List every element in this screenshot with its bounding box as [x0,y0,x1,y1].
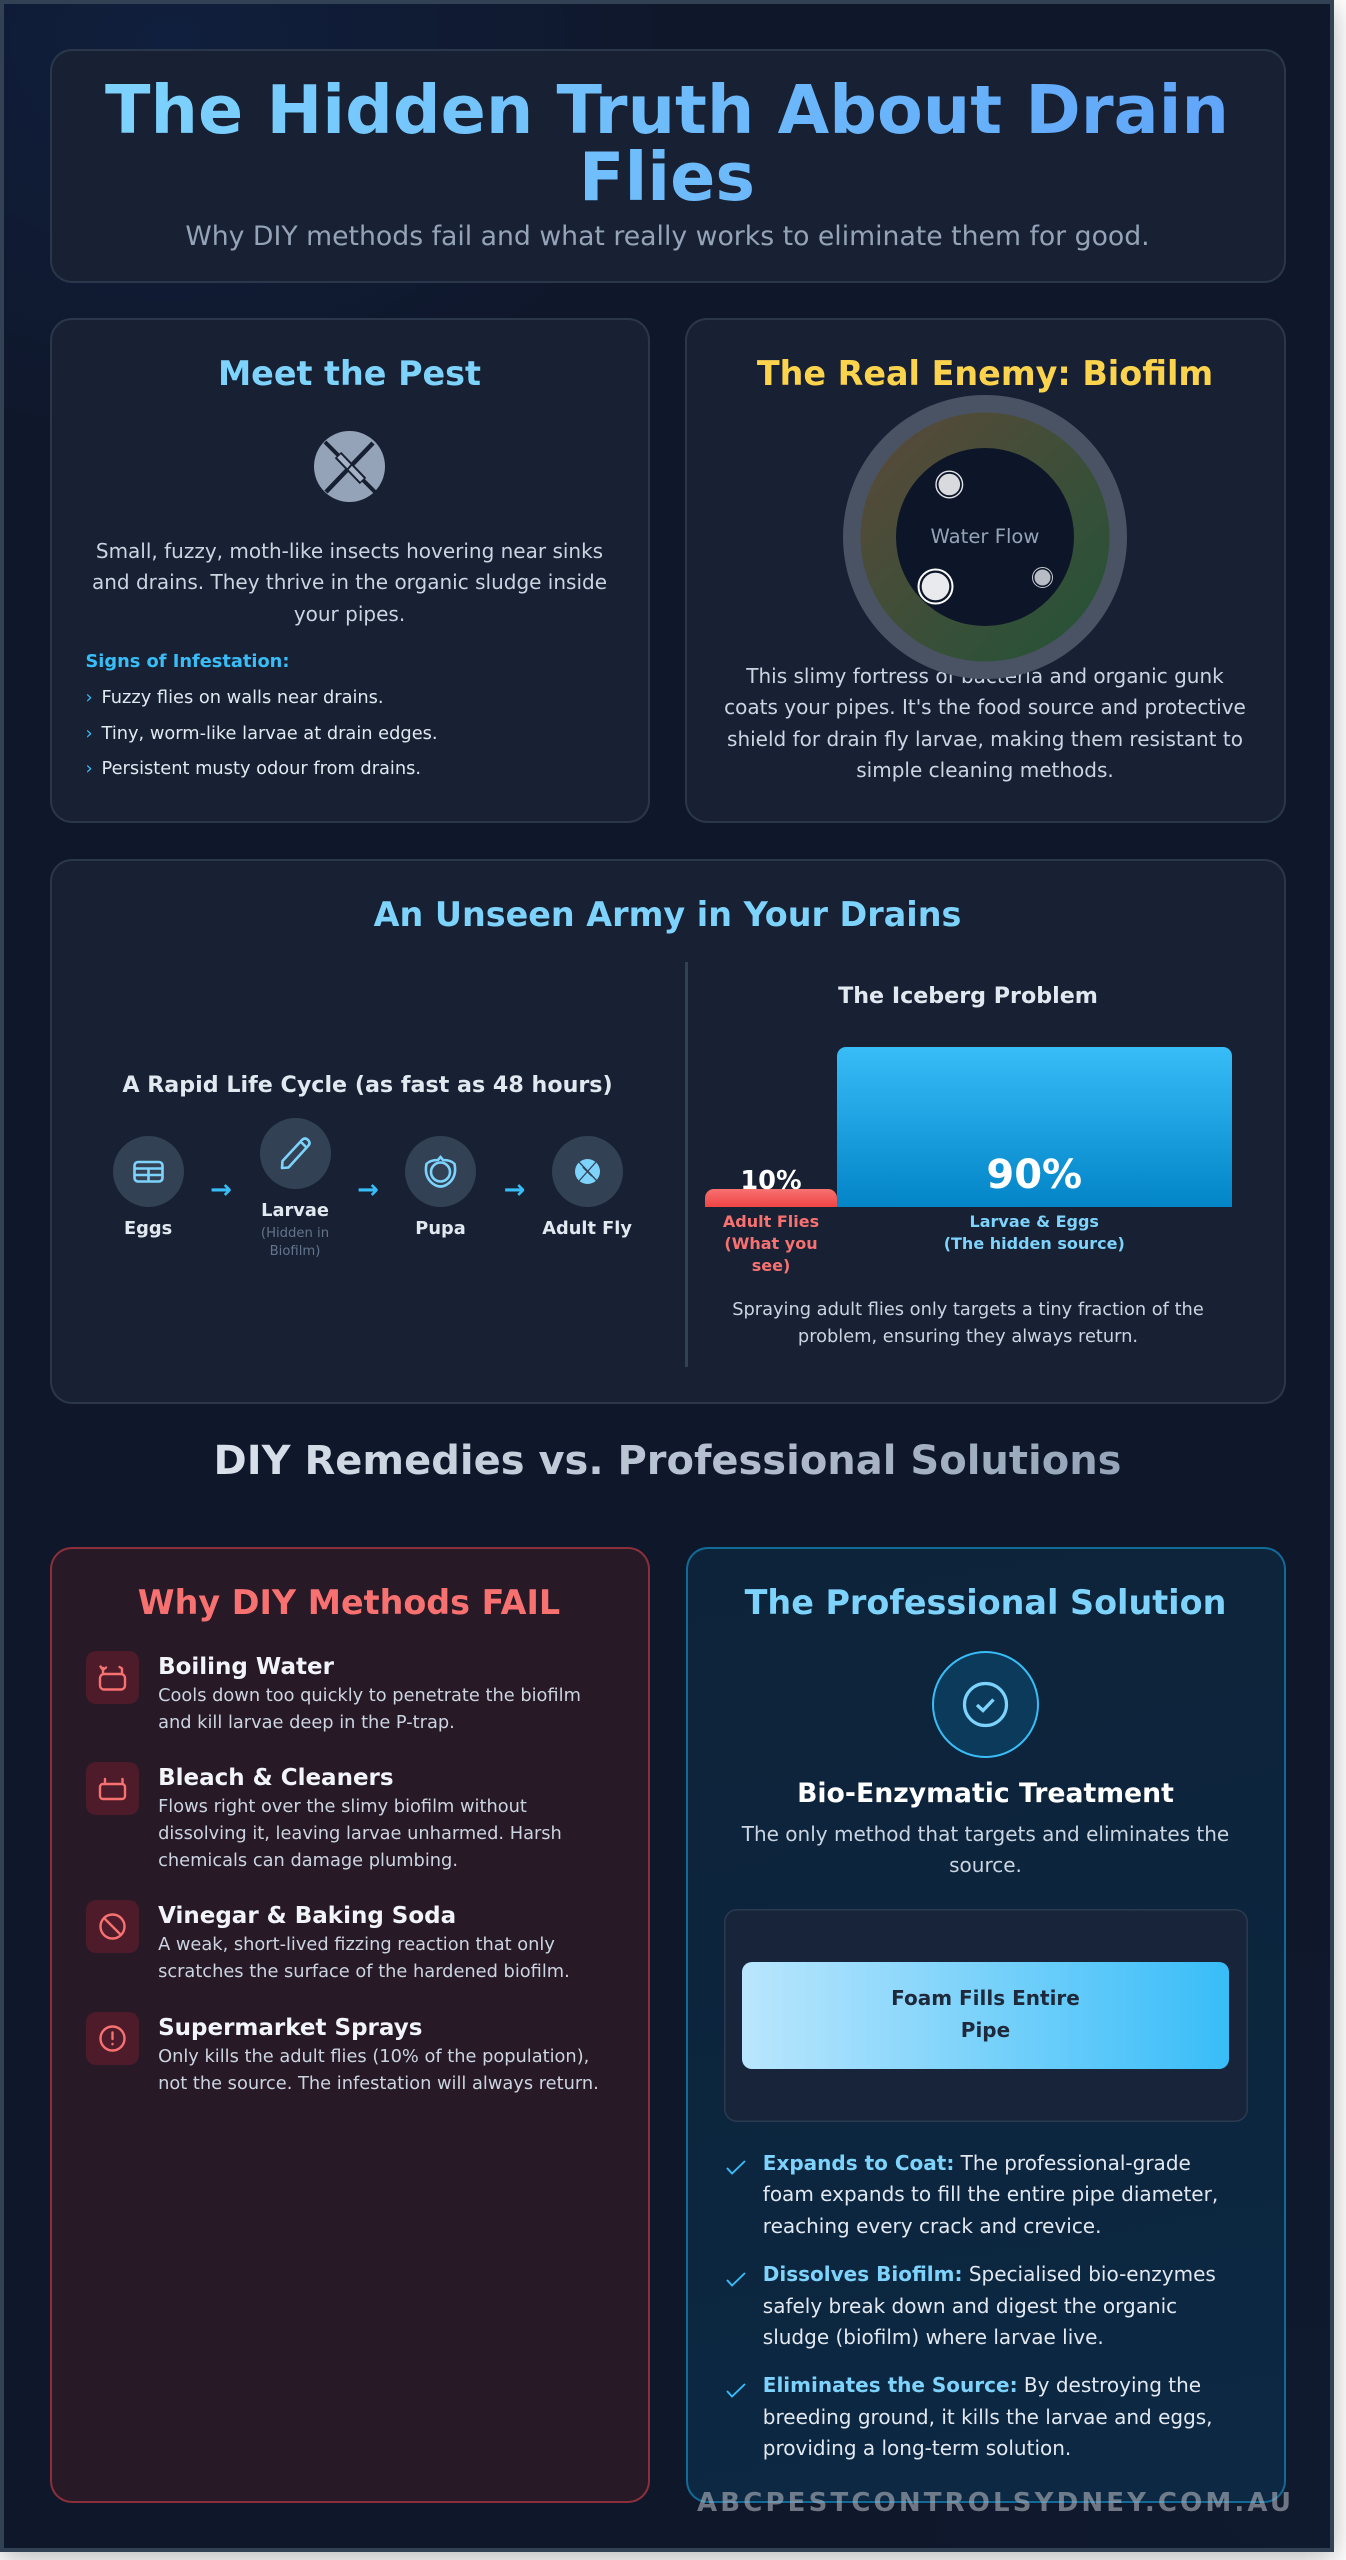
icon: kettle [86,1651,139,1704]
description text: shield for drain fly larvae, making them resistant to [727,727,1243,751]
benefit text: breeding ground, it kills the larvae and eggs, [763,2405,1213,2429]
step: adult fly [542,1136,632,1239]
description text: coats your pipes. It's the food source and protective [724,695,1246,719]
label: adult flies: see) [752,1256,790,1275]
item: bleach and cleaners [86,1762,562,1871]
benefit text: Dissolves Biofilm: Specialised bio-enzymes [763,2262,1216,2286]
bar chart: iceberg [705,1047,1232,1275]
title: treatment: Bio-Enzymatic Treatment [797,1778,1174,1808]
description text [724,664,1246,782]
benefit text [763,2262,1216,2349]
step: pupa [405,1136,476,1239]
benefit text: providing a long-term solution. [763,2436,1071,2460]
title: Supermarket Sprays [158,2015,422,2041]
step: larvae [260,1118,331,1259]
label: adult fly: Adult Fly [542,1218,632,1239]
text: iceberg explanation [732,1299,1204,1347]
benefit text: Expands to Coat: The professional-grade [763,2151,1191,2175]
icon: larvae [260,1118,331,1189]
item: supermarket sprays [86,2012,599,2094]
icon: crossed-out fly [314,431,385,502]
description text: Small, fuzzy, moth-like insects hovering near sinks [96,539,603,563]
check mark [726,2160,746,2175]
benefit: dissolves biofilm [726,2262,1216,2349]
description [158,1934,570,1982]
heading: an unseen army: An Unseen Army in Your Drains [374,895,961,934]
arrow 3: → [504,1175,525,1205]
benefit text: foam expands to fill the entire pipe diameter, [763,2182,1218,2206]
label: adult flies: Adult Flies [723,1212,819,1231]
icon: check badge [932,1651,1039,1758]
description text: simple cleaning methods. [856,758,1114,782]
benefit text: reaching every crack and crevice. [763,2214,1101,2238]
description text: This slimy fortress of bacteria and organic gunk [746,664,1224,688]
description text: your pipes. [294,602,405,626]
panel: unseen army [50,859,1286,1404]
diagram: pipe cross-section [843,395,1127,679]
heading: meet the pest: Meet the Pest [218,354,481,393]
note: hidden in biofilm: Biofilm) [270,1244,320,1259]
item: vinegar and baking soda [86,1900,570,1982]
benefit text [763,2373,1213,2460]
description: chemicals can damage plumbing. [158,1850,458,1871]
list: signs: Fuzzy flies on walls near drains. [102,687,384,708]
title [102,77,1232,211]
note: hidden in biofilm: (Hidden in [261,1226,329,1241]
panel: header [50,49,1286,283]
label: pupa: Pupa [415,1218,466,1239]
icon: alert [86,2012,139,2065]
foam label: Pipe [961,2018,1010,2042]
title: Flies [579,138,755,216]
panel: meet the pest [50,318,650,823]
label: larvae: Larvae [261,1200,329,1221]
value: 10%: 10% [740,1166,802,1196]
note: hidden in biofilm [261,1226,329,1259]
subheading: signs of infestation: Signs of Infestation: [86,651,289,672]
description: scratches the surface of the hardened biofilm. [158,1961,570,1982]
list: signs [86,687,438,779]
list: signs: › [86,758,93,779]
description: A weak, short-lived fizzing reaction that only [158,1934,555,1955]
icon: bottle [86,1762,139,1815]
description text: and drains. They thrive in the organic sludge inside [92,570,607,594]
diagram: foam in pipe [724,1909,1248,2122]
title: Boiling Water [158,1654,334,1680]
heading: the professional solution: The Professional Solution [745,1583,1226,1622]
panel: professional solution [686,1546,1286,2503]
diagram: pipe cross-section: Water Flow [931,525,1039,548]
item: boiling water [86,1651,581,1733]
label: adult flies [723,1212,819,1275]
description text [92,539,607,626]
description: Cools down too quickly to penetrate the biofilm [158,1685,581,1706]
benefit: expands to coat [726,2151,1218,2238]
text: iceberg explanation: Spraying adult flies only targets a tiny fraction of the [732,1299,1204,1320]
description [158,1796,562,1871]
check mark [726,2272,746,2287]
foam label [891,1986,1080,2042]
arrow 1: → [210,1175,232,1205]
watermark: ABCPESTCONTROLSYDNEY.COM.AU [697,2488,1294,2518]
description: Flows right over the slimy biofilm without [158,1796,527,1817]
description [158,2046,599,2094]
heading: diy vs professional: DIY Remedies vs. Professional Solutions [214,1438,1121,1484]
text: treatment summary: The only method that targets and eliminates the [742,1822,1229,1846]
icon: eggs [113,1136,184,1207]
title: The Hidden Truth About Drain [105,71,1229,149]
benefit text: sludge (biofilm) where larvae live. [763,2325,1104,2349]
label: eggs: Eggs [124,1218,172,1239]
foam label: Foam Fills Entire [891,1986,1080,2010]
description: dissolving it, leaving larvae unharmed. Harsh [158,1823,562,1844]
subtitle: Why DIY methods fail and what really works to eliminate them for good. [185,221,1150,252]
heading: the real enemy: The Real Enemy: Biofilm [757,354,1213,393]
list: signs: › [86,723,93,744]
heading: life cycle: A Rapid Life Cycle (as fast as 48 hours) [122,1072,613,1098]
bar: 10 percent [705,1189,836,1207]
label: larvae and eggs: (The hidden source) [944,1234,1125,1253]
label: larvae and eggs [944,1212,1125,1253]
check mark [726,2383,746,2398]
heading: why diy fails: Why DIY Methods FAIL [138,1583,560,1622]
label: adult flies: (What you [724,1234,818,1253]
icon: pupa [405,1136,476,1207]
description: and kill larvae deep in the P-trap. [158,1712,455,1733]
title: Vinegar & Baking Soda [158,1903,456,1929]
benefit text [763,2151,1218,2238]
title: Bleach & Cleaners [158,1765,394,1791]
step: eggs [113,1136,184,1239]
bar: 90 percent [836,1047,1232,1207]
benefit text: Eliminates the Source: By destroying the [763,2373,1201,2397]
value: 90%: 90% [986,1152,1082,1198]
heading: iceberg problem: The Iceberg Problem [838,983,1098,1009]
panel: biofilm [685,318,1286,823]
description [158,1685,581,1733]
list: signs: Tiny, worm-like larvae at drain edges. [102,723,438,744]
label: larvae and eggs: Larvae & Eggs [970,1212,1099,1231]
benefit: eliminates the source [726,2373,1213,2460]
panel: why diy fails [50,1546,650,2503]
text: treatment summary [742,1822,1229,1877]
list: signs: Persistent musty odour from drains. [102,758,421,779]
icon: adult fly [552,1136,623,1207]
text: iceberg explanation: problem, ensuring they always return. [798,1326,1138,1347]
foam bar [742,1962,1229,2069]
text: treatment summary: source. [949,1853,1022,1877]
description: Only kills the adult flies (10% of the population), [158,2046,589,2067]
description: not the source. The infestation will always return. [158,2073,599,2094]
arrow 2: → [357,1175,379,1205]
benefit text: safely break down and digest the organic [763,2294,1177,2318]
icon: ban [86,1900,139,1953]
list: signs: › [86,687,93,708]
